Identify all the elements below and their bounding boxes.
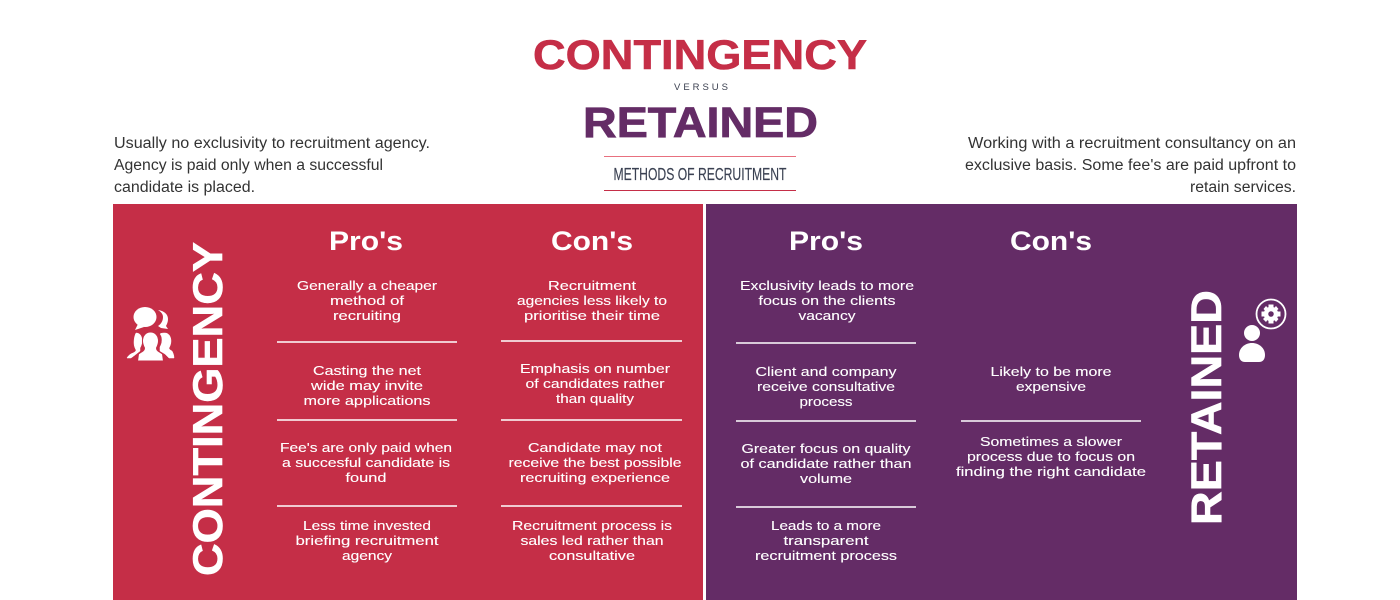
label: versus: VERSUS: [674, 82, 728, 93]
pro 1: vacancy: [798, 308, 856, 323]
column: retained pros: [736, 226, 916, 563]
column: contingency pros: [277, 226, 457, 563]
pro 4: Less time invested: [303, 518, 431, 533]
pro 4: briefing recruitment: [296, 533, 439, 548]
con 2: [520, 361, 671, 406]
con 3: [508, 440, 682, 485]
pro 2: wide may invite: [310, 378, 423, 393]
con 1: prioritise their time: [524, 308, 660, 323]
pro 1: [297, 278, 438, 323]
con 4: consultative: [549, 548, 635, 563]
pro 2: [304, 363, 431, 408]
con 3: recruiting experience: [520, 470, 670, 485]
text block: retained description: Working with a recruitment consultancy on an: [968, 135, 1296, 152]
con 4: [512, 518, 672, 563]
pro 3: of candidate rather than: [740, 456, 912, 471]
title: retained: RETAINED: [583, 99, 818, 147]
pro 1: Generally a cheaper: [297, 278, 438, 293]
pro 3: Greater focus on quality: [742, 441, 911, 456]
pro 3: Fee's are only paid when: [280, 440, 452, 455]
pro 2: receive consultative: [757, 379, 895, 394]
pro 1: Exclusivity leads to more: [740, 278, 914, 293]
pro 4: agency: [342, 548, 392, 563]
heading: pros: Pro's: [329, 226, 403, 256]
con 2: [956, 434, 1146, 479]
pro 2: Client and company: [756, 364, 897, 379]
pro 1: [740, 278, 914, 323]
panel: contingency: [113, 204, 703, 600]
subtitle: methods of recruitment: METHODS OF RECRUITMENT: [614, 164, 787, 184]
pro 4: recruitment process: [755, 548, 897, 563]
pro 1: recruiting: [333, 308, 401, 323]
con 1: [990, 364, 1112, 394]
pro 3: a succesful candidate is: [282, 455, 450, 470]
icon: person with gear: [1239, 300, 1286, 362]
pro 4: transparent: [784, 533, 869, 548]
text block: retained description: retain services.: [1190, 179, 1296, 196]
label: vertical contingency: CONTINGENCY: [184, 242, 231, 576]
con 1: Recruitment: [548, 278, 636, 293]
heading: pros: Pro's: [789, 226, 863, 256]
con 2: Emphasis on number: [520, 361, 671, 376]
con 1: [517, 278, 667, 323]
text block: contingency description: Agency is paid only when a successful: [114, 157, 383, 174]
pro 4: [296, 518, 439, 563]
con 4: sales led rather than: [520, 533, 664, 548]
text block: retained description: [965, 135, 1296, 196]
panel: retained: [706, 204, 1297, 600]
pro 2: Casting the net: [313, 363, 421, 378]
title: contingency: CONTINGENCY: [533, 31, 867, 78]
con 2: of candidates rather: [526, 376, 665, 391]
con 3: Candidate may not: [528, 440, 662, 455]
con 1: Likely to be more: [990, 364, 1112, 379]
pro 1: focus on the clients: [758, 293, 896, 308]
pro 3: found: [346, 470, 386, 485]
pro 2: process: [800, 394, 853, 409]
heading: cons: Con's: [1010, 226, 1092, 256]
pro 2: more applications: [304, 393, 431, 408]
con 1: expensive: [1016, 379, 1086, 394]
pro 4: [755, 518, 897, 563]
con 2: process due to focus on: [967, 449, 1135, 464]
column: retained cons: [956, 226, 1146, 479]
icon: group of people with speech bubbles: [127, 307, 174, 361]
con 4: Recruitment process is: [512, 518, 672, 533]
con 2: finding the right candidate: [956, 464, 1146, 479]
pro 1: method of: [330, 293, 404, 308]
pro 3: [740, 441, 912, 486]
pro 3: volume: [800, 471, 852, 486]
column: contingency cons: [501, 226, 682, 563]
pro 2: [756, 364, 897, 409]
con 1: agencies less likely to: [517, 293, 667, 308]
text block: contingency description: candidate is placed.: [114, 179, 255, 196]
con 2: than quality: [556, 391, 634, 406]
label: vertical retained: RETAINED: [1183, 290, 1231, 525]
text block: contingency description: [114, 135, 430, 196]
pro 3: [280, 440, 452, 485]
text block: contingency description: Usually no exclusivity to recruitment agency.: [114, 135, 430, 152]
con 2: Sometimes a slower: [980, 434, 1123, 449]
text block: retained description: exclusive basis. Some fee's are paid upfront to: [965, 157, 1296, 174]
pro 4: Leads to a more: [771, 518, 881, 533]
heading: cons: Con's: [551, 226, 633, 256]
con 3: receive the best possible: [508, 455, 682, 470]
